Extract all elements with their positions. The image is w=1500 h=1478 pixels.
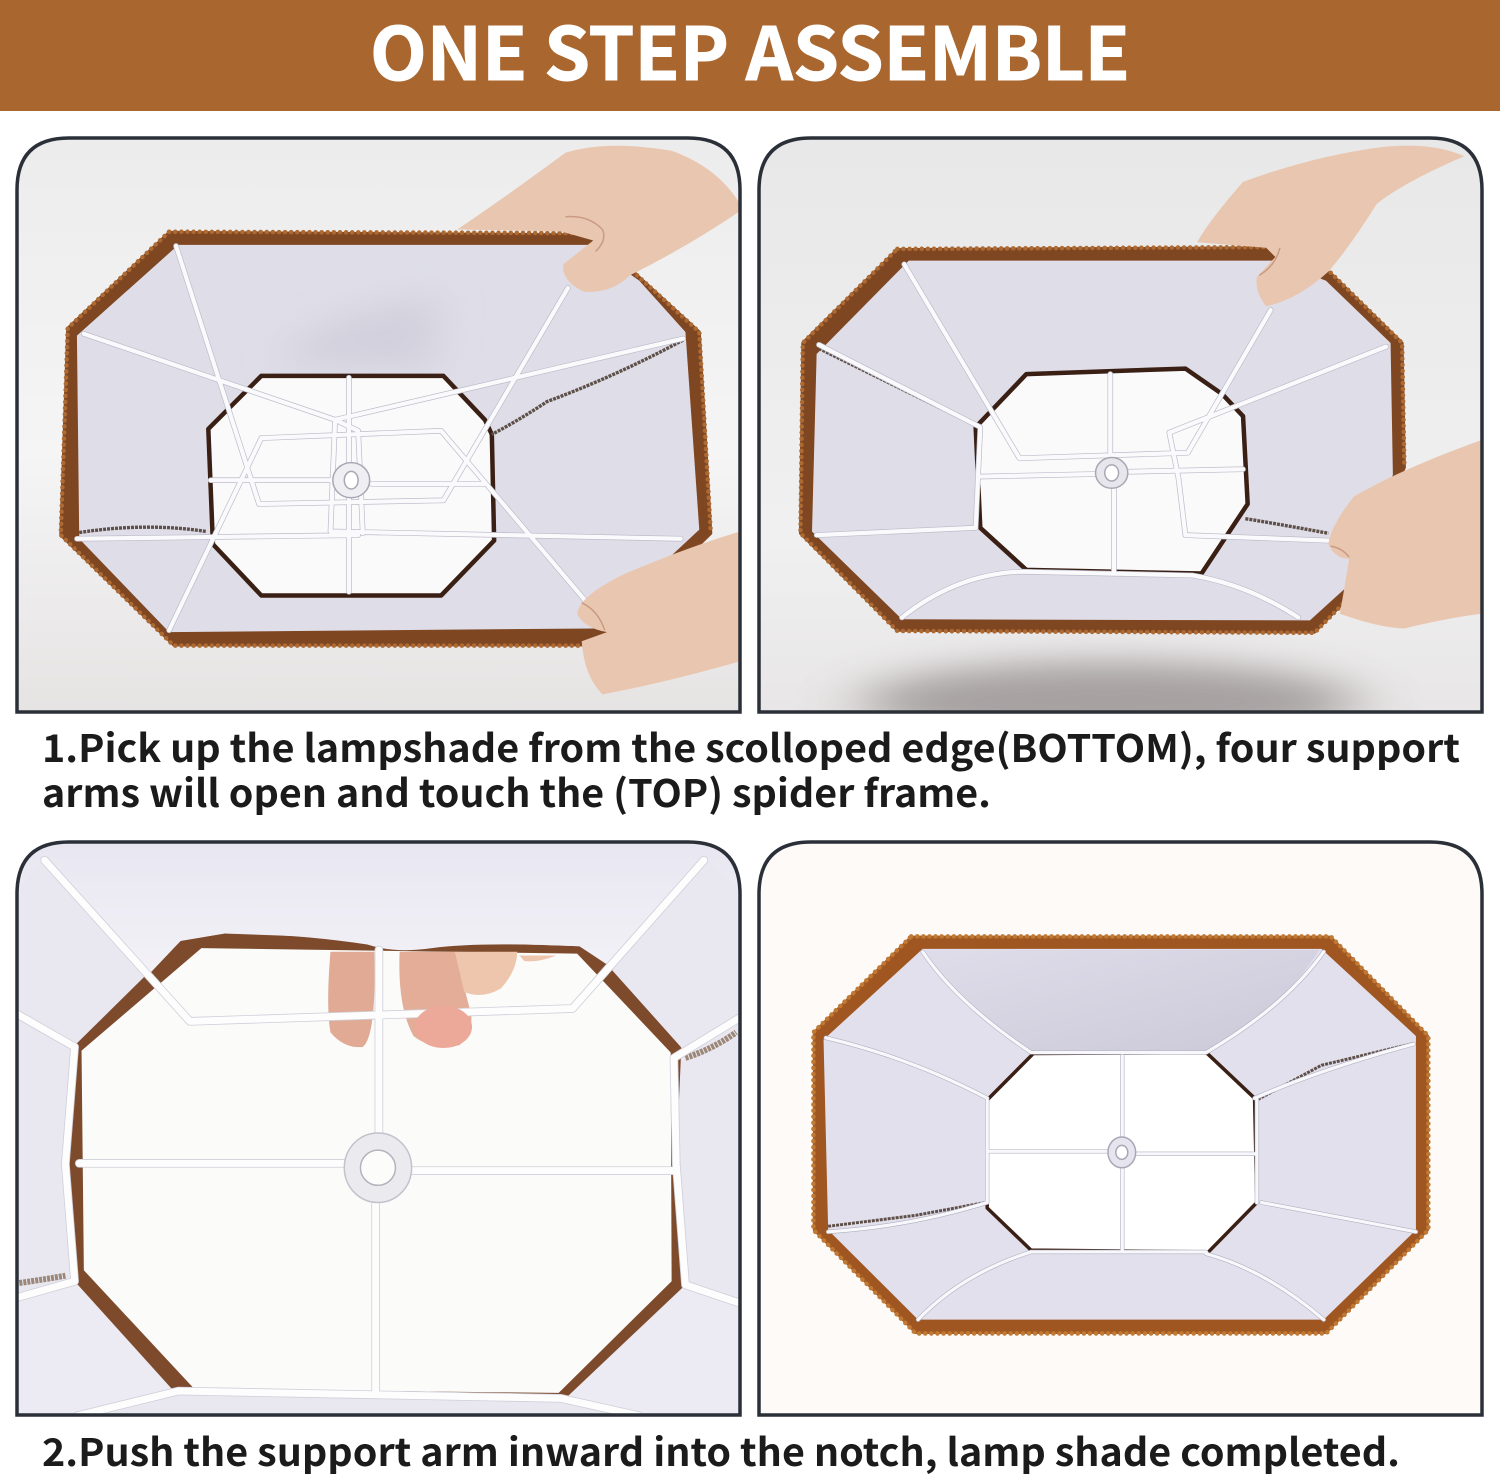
shadow [860,661,1358,742]
spider frame hub [344,1133,412,1203]
wire frame [17,860,740,1416]
fabric drape [128,934,622,972]
lampshade [61,232,711,646]
fingertip over wire [415,1006,472,1048]
hand: right [1328,440,1482,628]
step 1 caption: arms will open and touch the (TOP) spider frame. [42,763,991,818]
panel: step 1 photo, lifting the shade [17,138,740,712]
fingers behind frame [328,952,556,1047]
lampshade [813,936,1428,1334]
panel: step 2 photo, finished shade [759,842,1482,1416]
hand: top right [1197,146,1464,306]
opening [82,948,672,1393]
brown rim of the opening [58,934,692,1398]
lampshade [800,247,1404,633]
spider frame hub [1108,1137,1136,1168]
hand: bottom right [577,531,740,694]
step 2 caption: 2.Push the support arm inward into the notch, lamp shade completed. [42,1422,1400,1477]
panel: step 2 photo, close-up of the notch [17,842,740,1416]
title banner [0,0,1500,111]
spider frame hub [1096,458,1128,488]
panel: step 1 photo, arms opening [759,138,1482,742]
spider frame hub [333,463,370,498]
step 1 caption [42,718,1460,818]
step 1 caption: 1.Pick up the lampshade from the scolloped edge(BOTTOM), four support [42,718,1460,773]
hand: top right [457,146,740,292]
